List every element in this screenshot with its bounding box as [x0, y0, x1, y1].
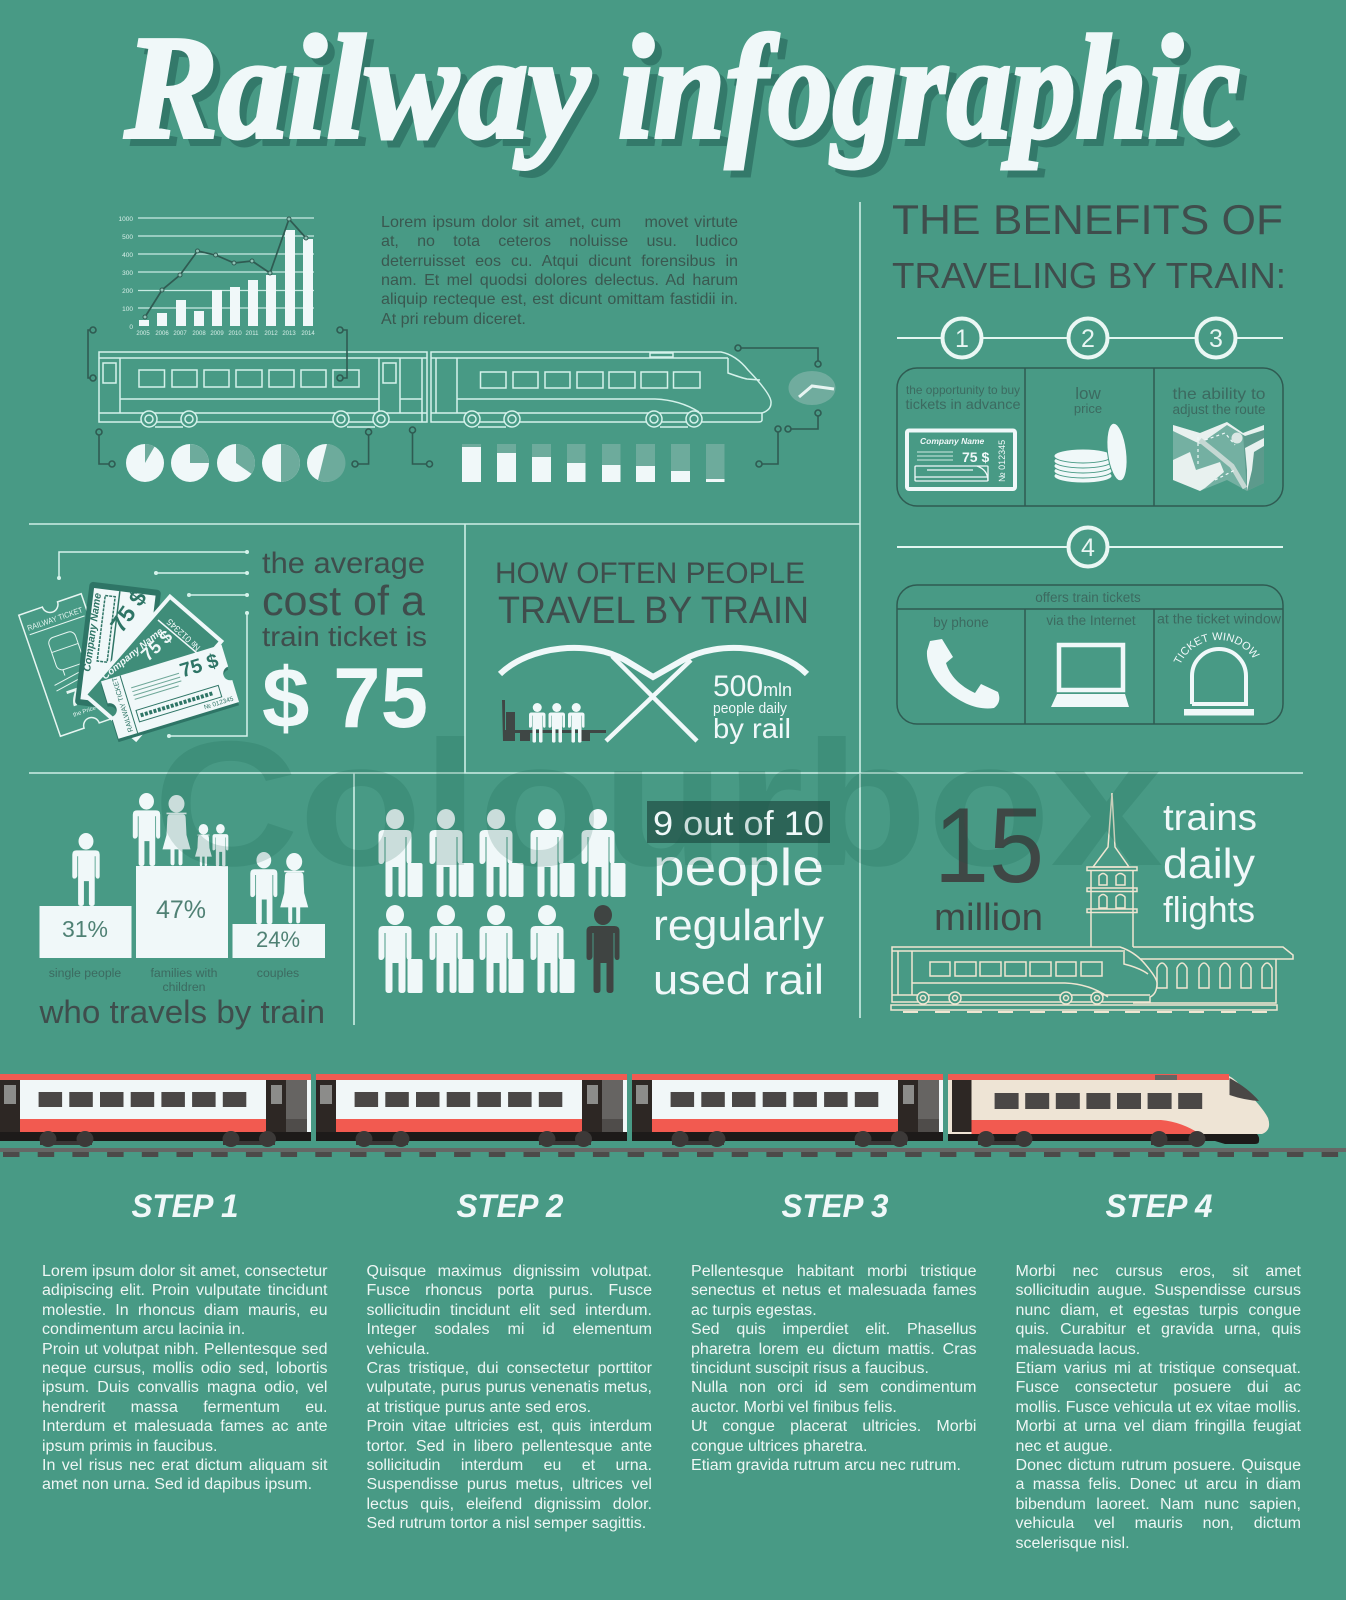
stat: 15 million: 15 [934, 785, 1044, 905]
text: average ticket cost: train ticket is [262, 621, 427, 652]
green ticket: № 012345 [165, 617, 202, 653]
track [0, 1148, 1346, 1154]
step 1 text: amet non urna. Sed id dapibus ipsum. [42, 1475, 312, 1493]
leader lines [57, 550, 249, 738]
step 4 marker [897, 528, 1283, 566]
icon: ticket window [1173, 632, 1260, 716]
front ticket: 75 $ [177, 650, 221, 682]
stat: 500 million: 500mln [713, 670, 792, 703]
step 4 text: Fusce consectetur posuere dui ac [1016, 1378, 1301, 1396]
step 1 text: Interdum et malesuada fames ac ante [42, 1417, 328, 1435]
card text: low price [1074, 384, 1102, 416]
step 1 text: ipsum. Duis convallis magna odio, vel [42, 1378, 328, 1396]
bar and line chart: 2005 [136, 331, 150, 337]
stacked bars [462, 444, 724, 482]
locomotive [431, 352, 771, 427]
step headings: STEP 3 [782, 1188, 889, 1224]
icon: map [1173, 422, 1264, 491]
step 3 text: tincidunt suscipit risus a faucibus. [691, 1359, 929, 1377]
numbered steps 1 to 3 [897, 318, 1283, 358]
step 4 text: sollicitudin augue. Suspendisse cursus [1016, 1281, 1301, 1299]
bar and line chart: 400 [122, 252, 133, 259]
stat: 500 million: people daily [713, 701, 788, 717]
title: Railway [124, 6, 591, 170]
green ticket: Company Name [100, 626, 166, 682]
step 2 text: Suspendisse purus metus, ultrices vel [366, 1475, 652, 1493]
station building [891, 947, 1293, 1012]
outline ticket [19, 594, 123, 736]
heading: benefits: THE BENEFITS OF [892, 196, 1283, 243]
channel labels [933, 590, 1281, 630]
step 2 text: vulputate, purus purus venenatis metus, [366, 1378, 652, 1396]
step 4 text: bibendum laoreet. Nam nunc sapien, [1016, 1495, 1301, 1513]
bar and line chart: 0 [129, 324, 133, 331]
tower [1087, 793, 1137, 947]
bar chart: who travels: 24% [256, 927, 300, 952]
step headings: STEP 1 [132, 1188, 238, 1224]
illustration: station and train [891, 793, 1293, 1012]
bar chart: who travels: single people [49, 966, 121, 980]
locomotive [948, 1074, 1269, 1147]
step 4 text: malesuada lacus. [1016, 1340, 1140, 1358]
card text: advance tickets [906, 383, 1021, 412]
bar and line chart: 200 [122, 288, 133, 295]
bar chart: who travels [40, 793, 325, 994]
step 3 text: senectus et netus et malesuada fames [691, 1281, 976, 1299]
step 1 text: molestie. In rhoncus diam mauris, eu [42, 1301, 328, 1319]
heading: how often: TRAVEL BY TRAIN [498, 590, 809, 632]
stat: 15 million: million [934, 897, 1043, 939]
step 2 text: Integer sodales mi id elementum [366, 1320, 652, 1338]
stat: 9 out of 10 [647, 801, 830, 1003]
intro paragraph: at, no tota ceteros noluisse usu. Iudico [381, 232, 738, 250]
bar and line chart: 1000 [119, 216, 133, 223]
bar and line chart: 2010 [228, 331, 242, 337]
step 2 text: Fusce rhoncus porta purus. Fusce [366, 1281, 652, 1299]
stat: 9 out of 10: people [653, 839, 824, 897]
bar and line chart: 500 [122, 234, 133, 241]
bar and line chart: 2008 [192, 331, 206, 337]
intro paragraph: aliquip recteque est, est dicunt omittam fastidii in. [381, 290, 738, 308]
bar and line chart: 2012 [264, 331, 278, 337]
rear carriage [99, 352, 427, 427]
step 1 text [42, 1262, 328, 1493]
connector lines [88, 327, 821, 467]
bar and line chart: 2007 [173, 331, 187, 337]
stat: trains daily flights [1163, 797, 1257, 930]
company ticket: Company Name [81, 592, 104, 672]
icon: ticket: 75 $ [962, 449, 989, 465]
stat: 9 out of 10: used rail [653, 956, 824, 1003]
carriage 2 [316, 1074, 627, 1147]
heading: how often: HOW OFTEN PEOPLE [495, 557, 805, 590]
pie charts [126, 444, 345, 482]
front ticket: № 012345 [203, 696, 235, 711]
stat: trains daily flights: trains [1163, 797, 1257, 838]
step 1 text: ipsum primis in faucibus. [42, 1437, 218, 1455]
step 4 text: Etiam varius mi at tristique consequat. [1016, 1359, 1301, 1377]
green ticket: 75 $ [137, 626, 176, 665]
icon: ticket: № 012345 [997, 440, 1007, 482]
step headings: STEP 4 [1106, 1188, 1213, 1224]
text: average ticket cost: cost of a [262, 577, 426, 624]
channel labels: at the ticket window [1157, 612, 1281, 626]
step 2 text: sollicitudin tincidunt elit sed interdum. [366, 1301, 652, 1319]
step 2 text: sollicitudin interdum eu et urna. [366, 1456, 652, 1474]
step 2 text: Sed rutrum tortor a nisl semper sagittis. [366, 1514, 646, 1532]
front ticket [101, 644, 239, 742]
heading: who travels: who travels by train [38, 994, 325, 1030]
icon: coins [1054, 422, 1130, 483]
step headings: STEP 2 [456, 1188, 564, 1224]
step 4 text: Morbi at urna vel diam fringilla feugiat [1016, 1417, 1301, 1435]
green ticket [85, 597, 221, 739]
bar chart: who travels: 47% [156, 896, 206, 924]
step 4 text: nunc diam, et egestas turpis congue [1016, 1301, 1301, 1319]
stat: 9 out of 10: 9 out of 10 [653, 805, 824, 843]
step 1 text: In vel risus nec erat dictum aliquam sit [42, 1456, 328, 1474]
bar and line chart: 2011 [246, 331, 259, 337]
icon: ticket [907, 430, 1015, 489]
bar chart: who travels: 31% [62, 916, 108, 942]
step 1 text: hendrerit massa fermentum eu. [42, 1398, 328, 1416]
carriage 3 [632, 1074, 943, 1147]
card text: adjust route: adjust the route [1172, 402, 1266, 417]
step 3 text: pharetra lorem eu dictum mattis. Cras [691, 1340, 976, 1358]
panel: benefit cards [897, 368, 1283, 506]
icon: clock dial [788, 371, 836, 405]
bar and line chart: 2006 [155, 331, 169, 337]
outline train [99, 352, 771, 427]
pictogram: rail travellers [378, 809, 626, 993]
numbered steps 1 to 3: 3 [1209, 325, 1223, 353]
intro paragraph: nam. Et mel quodsi dolores delectus. Ad harum [381, 271, 738, 289]
station train [892, 947, 1157, 1004]
title: infographic [618, 6, 1240, 170]
icon: bench with people [502, 700, 606, 743]
heading: how often [495, 557, 809, 632]
heading: benefits [892, 196, 1286, 296]
step 2 text: at tristique purus ante sed eros. [366, 1398, 591, 1416]
step 1 text: adipiscing elit. Proin vulputate tincidunt [42, 1281, 328, 1299]
step 4 marker: 4 [1081, 534, 1095, 562]
pictograms [72, 793, 308, 924]
step 1 text: neque cursus, mollis odio sed, lobortis [42, 1359, 328, 1377]
step 4 text: vehicula vel mauris non, dictum [1016, 1514, 1301, 1532]
bar and line chart: 2014 [301, 331, 315, 337]
step 3 text: Nulla non orci id sem condimentum [691, 1378, 976, 1396]
step 1 text: condimentum arcu lacinia in. [42, 1320, 245, 1338]
colour train [0, 1074, 1346, 1154]
icon: laptop [1051, 645, 1129, 707]
channel labels: offers train tickets [1035, 590, 1141, 605]
icon: ticket fan [19, 581, 239, 742]
title [124, 6, 1240, 170]
step 4 text: scelerisque nisl. [1016, 1534, 1130, 1552]
bar and line chart: 2013 [282, 331, 296, 337]
step 2 text: lectus quis, eleifend dignissim dolor. [366, 1495, 652, 1513]
bar chart: who travels: couples [257, 966, 299, 980]
step headings [132, 1188, 1213, 1224]
step 4 text [1016, 1262, 1301, 1552]
channel labels: by phone [933, 615, 989, 630]
outline ticket: the Price [73, 705, 98, 719]
card text: adjust route: the ability to [1172, 386, 1266, 403]
text: average ticket cost: $ 75 [262, 651, 428, 746]
numbered steps 1 to 3: 2 [1081, 325, 1095, 353]
card text: low price: price [1074, 401, 1102, 416]
step 3 text: Pellentesque habitant morbi tristique [691, 1262, 976, 1280]
step 2 text [366, 1262, 652, 1532]
bar and line chart: 300 [122, 270, 133, 277]
stat: 500 million: by rail [713, 713, 791, 744]
stat: trains daily flights: flights [1163, 889, 1255, 930]
watermark: Colourbox [153, 704, 1163, 903]
numbered steps 1 to 3: 1 [955, 325, 969, 353]
stat: trains daily flights: daily [1163, 840, 1255, 887]
step 3 text: congue ultrices pharetra. [691, 1437, 867, 1455]
step 2 text: tortor. Sed in libero pellentesque ante [366, 1437, 652, 1455]
company ticket [75, 581, 161, 713]
company ticket: 75 $ [105, 585, 152, 637]
outline ticket: 75 [64, 679, 98, 713]
step 2 text: vehicula. [366, 1340, 430, 1358]
step 3 text: ac turpis egestas. [691, 1301, 817, 1319]
stat: 500 million [713, 670, 792, 744]
icon: phone [927, 639, 999, 709]
step 3 text: auctor. Morbi vel finibus felis. [691, 1398, 897, 1416]
intro paragraph: Lorem ipsum dolor sit amet, cum movet virtute [381, 213, 738, 231]
text: average ticket cost [262, 547, 428, 746]
step 2 text: Quisque maximus dignissim volutpat. [366, 1262, 652, 1280]
card text: adjust route [1172, 386, 1266, 417]
step 1 text: Proin ut volutpat nibh. Pellentesque sed [42, 1340, 328, 1358]
card text: advance tickets: tickets in advance [906, 396, 1021, 412]
carriage 1 [0, 1074, 311, 1147]
icon: ticket: Company Name [920, 436, 985, 446]
intro paragraph [381, 213, 738, 328]
bar and line chart [119, 216, 315, 337]
step 3 text: Etiam gravida rutrum arcu nec rutrum. [691, 1456, 961, 1474]
heading: benefits: TRAVELING BY TRAIN: [892, 255, 1286, 296]
icon: ticket window: TICKET WINDOW [1173, 632, 1260, 662]
intro paragraph: At pri rebum diceret. [381, 310, 526, 328]
step 4 text: quis. Curabitur et gravida urna, quis [1016, 1320, 1301, 1338]
step 2 text: Proin vitae ultricies est, quis interdum [366, 1417, 652, 1435]
step 4 text: mollis. Fusce vehicula ut ex vitae mollis. [1016, 1398, 1301, 1416]
step 3 text: Sed quis imperdiet elit. Phasellus [691, 1320, 976, 1338]
panel: ticket channels [896, 584, 1284, 725]
front ticket: RAILWAY TICKET [111, 676, 135, 733]
step 4 text: Donec dictum rutrum posuere. Quisque [1016, 1456, 1301, 1474]
bar and line chart: 2009 [210, 331, 224, 337]
panel: dividers [29, 202, 1303, 1025]
step 3 text [691, 1262, 976, 1474]
step 4 text: a massa felis. Donec ut arcu in diam [1016, 1475, 1301, 1493]
card text: advance tickets: the opportunity to buy [906, 383, 1020, 397]
stat: 9 out of 10: regularly [653, 901, 824, 950]
bar chart: who travels: children [162, 980, 206, 994]
step 1 text: Lorem ipsum dolor sit amet, consectetur [42, 1262, 328, 1280]
card text: low price: low [1075, 384, 1101, 403]
step 4 text: nec et augue. [1016, 1437, 1113, 1455]
text: average ticket cost: the average [262, 547, 425, 580]
step 2 text: Cras tristique, dui consectetur porttitor [366, 1359, 652, 1377]
outline ticket: RAILWAY TICKET [26, 605, 84, 633]
bar and line chart: 100 [122, 306, 133, 313]
intro paragraph: deterruisset eos cu. Atqui dicunt forensibus in [381, 252, 738, 270]
step 3 text: Ut congue placerat ultricies. Morbi [691, 1417, 976, 1435]
bar chart: who travels: families with [151, 966, 218, 980]
icon: station arches [500, 648, 807, 741]
channel labels: via the Internet [1046, 613, 1136, 628]
step 4 text: Morbi nec cursus eros, sit amet [1016, 1262, 1301, 1280]
